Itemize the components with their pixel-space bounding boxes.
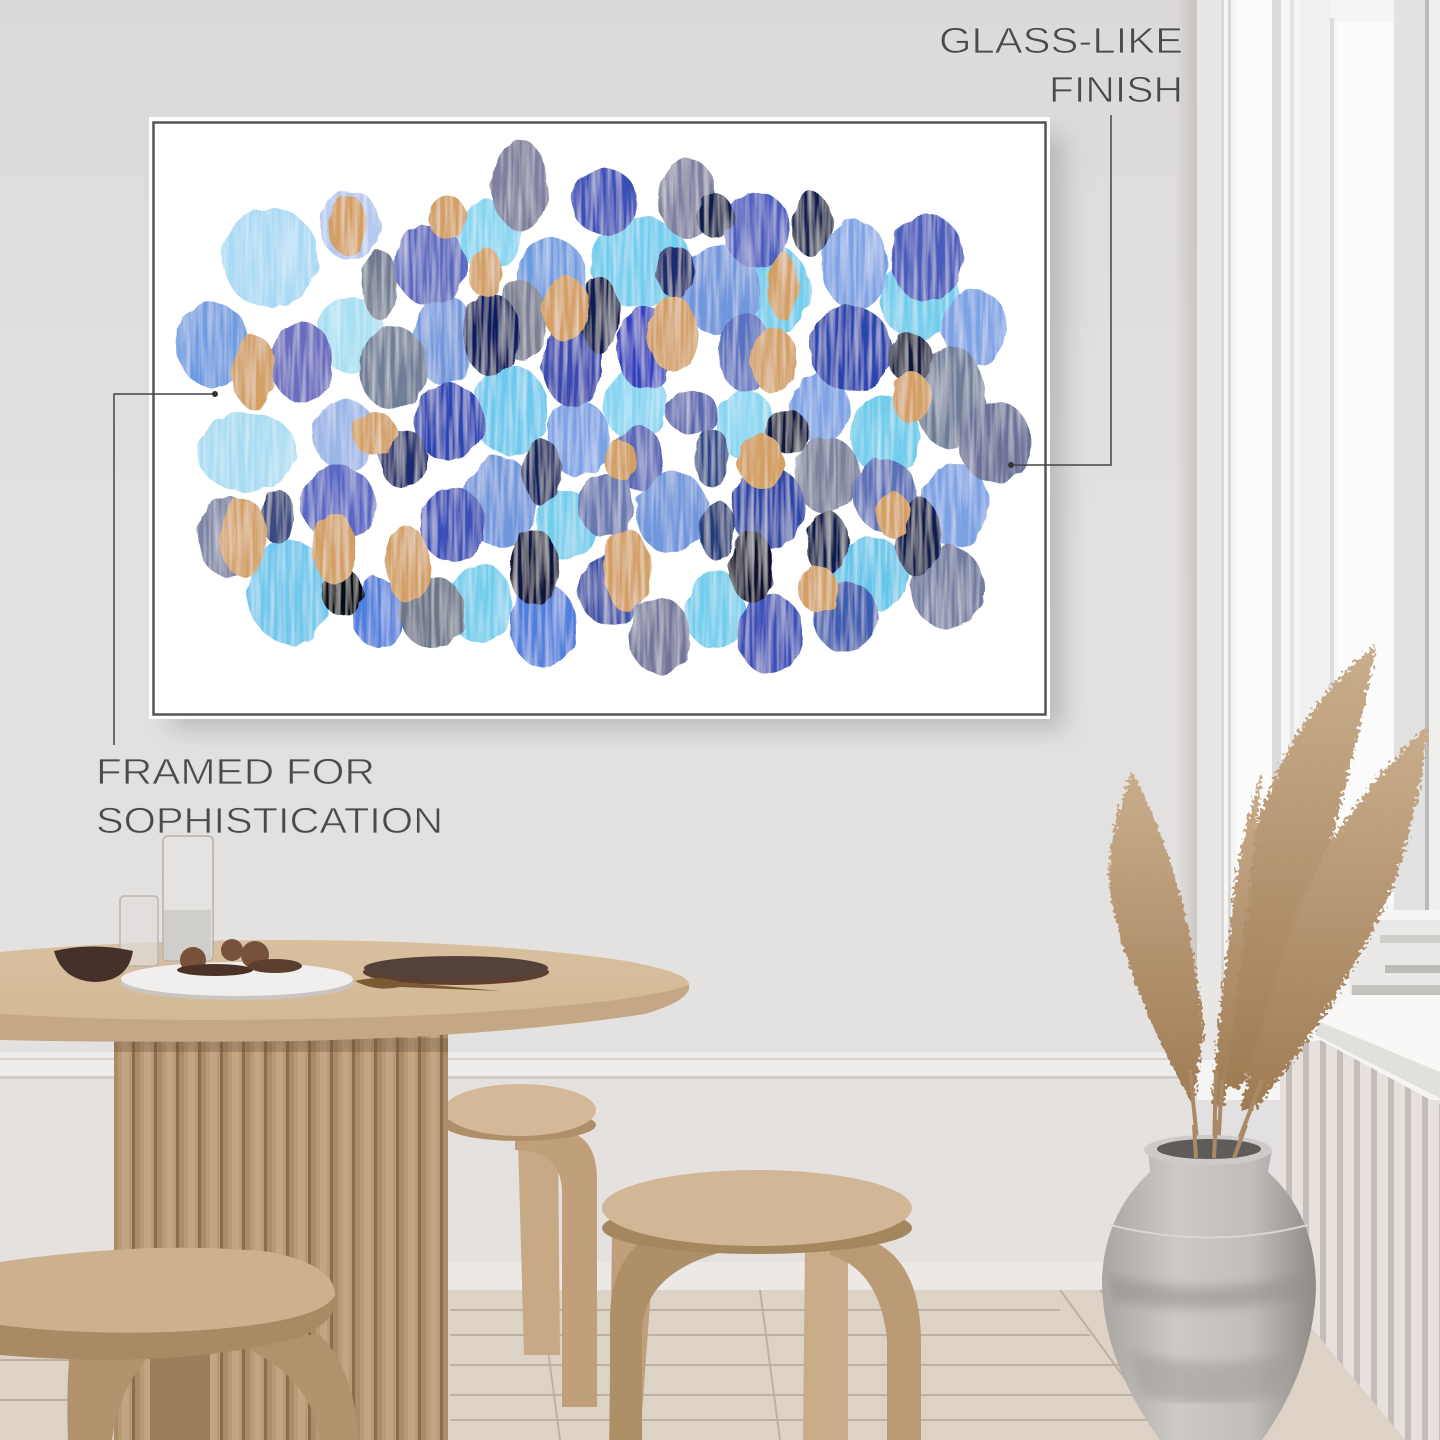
frame shadow	[170, 135, 1065, 730]
spoon	[355, 978, 500, 991]
glass carafe	[163, 836, 213, 961]
callout: framed for sophistication	[96, 391, 443, 841]
right stool	[602, 1170, 921, 1440]
light blue strokes	[197, 200, 960, 650]
callout heading: GLASS-LIKE	[939, 20, 1183, 61]
floor	[0, 1290, 1410, 1440]
callout heading second line: SOPHISTICATION	[96, 800, 443, 841]
callout: glass-like finish	[939, 20, 1183, 468]
mid blue strokes	[176, 190, 1008, 667]
leader line	[114, 394, 214, 745]
pampas grass	[1109, 645, 1428, 1110]
pedestal	[114, 1030, 448, 1440]
ceramic vase	[1102, 1120, 1316, 1440]
nuts	[177, 939, 302, 976]
wainscot rail	[0, 1052, 1200, 1290]
leader dot	[212, 391, 218, 397]
artwork brush strokes	[176, 140, 1031, 674]
vase opening	[1157, 1139, 1261, 1159]
window sill with books	[1315, 920, 1440, 1098]
painting	[149, 117, 1065, 730]
leader line	[1012, 115, 1111, 465]
inner stems	[1194, 1120, 1246, 1158]
table top	[0, 940, 689, 1020]
leader dot	[1008, 462, 1014, 468]
vase upper ring	[1110, 1225, 1308, 1238]
callout heading second line: FINISH	[1049, 69, 1183, 110]
deep blue strokes	[262, 168, 963, 674]
radiator	[1280, 1040, 1440, 1440]
vase body	[1102, 1150, 1316, 1440]
vase weathering	[1108, 1272, 1310, 1404]
wall shading near trim	[1175, 0, 1197, 1060]
wooden plate	[363, 956, 549, 985]
plume four	[1212, 770, 1262, 1105]
plume one	[1109, 772, 1204, 1105]
plume three	[1240, 725, 1428, 1110]
pampas stems	[1190, 1070, 1262, 1150]
drinking glass	[120, 896, 158, 966]
navy strokes	[322, 193, 941, 616]
gold leaf strokes	[219, 194, 930, 612]
window and trim	[1197, 0, 1440, 1100]
wall	[0, 0, 1200, 1300]
left stool	[0, 1248, 358, 1440]
tableware	[54, 836, 549, 1000]
back stool	[444, 1084, 597, 1407]
marble tray	[120, 962, 354, 1000]
table top edge	[0, 985, 689, 1042]
callout heading: FRAMED FOR	[96, 751, 375, 792]
white frame	[149, 117, 1050, 719]
inner edge	[154, 122, 1046, 714]
plume two	[1224, 645, 1376, 1090]
dark bowl	[54, 946, 133, 982]
vase mouth	[1144, 1135, 1272, 1165]
table shadow	[114, 1038, 448, 1052]
table	[0, 940, 689, 1440]
grey strokes	[198, 140, 1031, 674]
